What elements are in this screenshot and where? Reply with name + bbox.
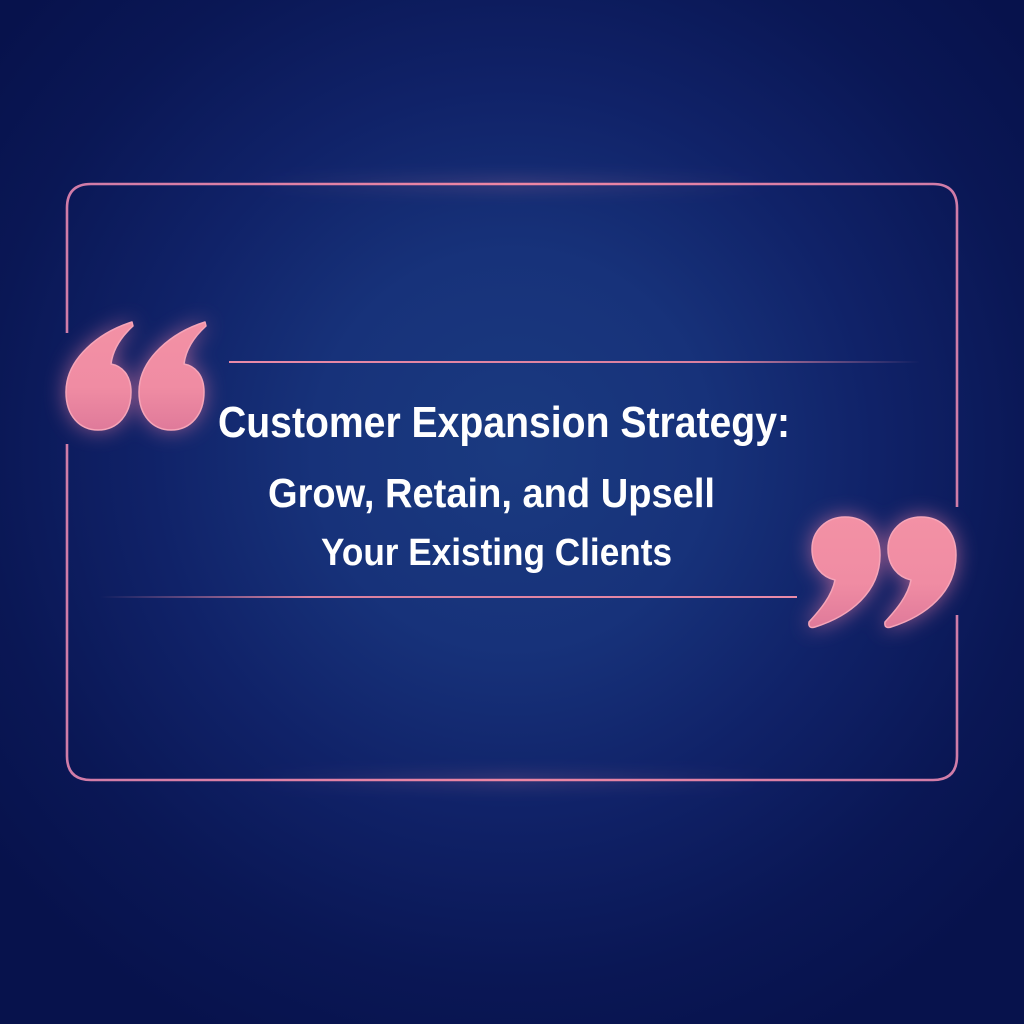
icon: closing quotation mark	[809, 517, 956, 627]
title line 2: Grow, Retain, and Upsell	[268, 470, 715, 516]
bottom divider line	[100, 596, 797, 598]
title line 1: Customer Expansion Strategy:	[218, 398, 790, 447]
title line 3: Your Existing Clients	[321, 532, 672, 574]
icon: opening quotation mark	[66, 322, 206, 430]
quote frame	[67, 180, 957, 784]
top divider line	[229, 361, 920, 363]
